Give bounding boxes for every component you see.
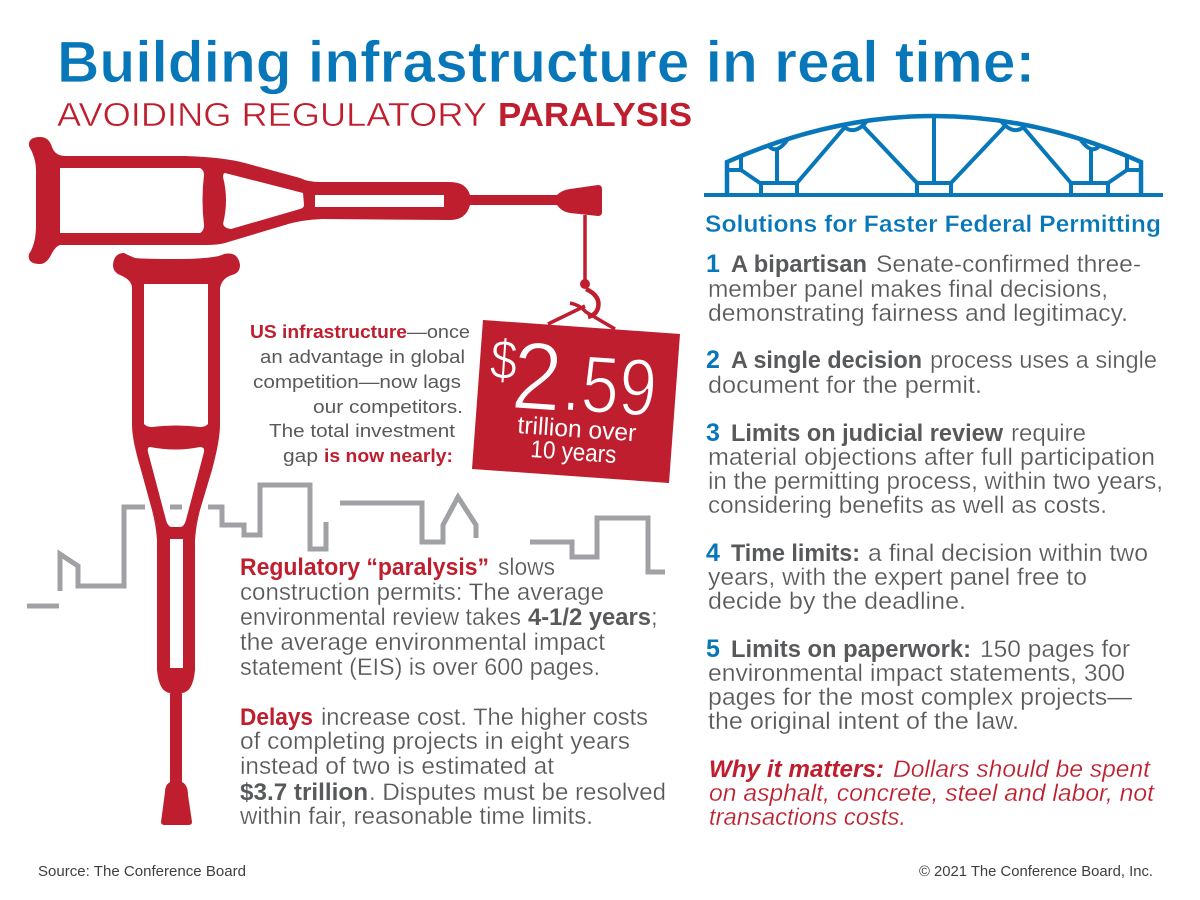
solution 2 bbox=[706, 346, 1157, 399]
solution 4: 4 bbox=[706, 539, 720, 567]
big number: .59 bbox=[560, 338, 660, 435]
solution 3: require bbox=[1011, 420, 1086, 447]
text: delays: Delays bbox=[240, 704, 313, 731]
solution 5: 5 bbox=[706, 635, 720, 663]
icon: horizontal crutch crane bbox=[29, 137, 602, 264]
solution 2: 2 bbox=[706, 346, 720, 374]
text: US infrastructure: —once bbox=[407, 321, 470, 342]
solution 5: pages for the most complex projects— bbox=[708, 684, 1132, 711]
subtitle: AVOIDING REGULATORY bbox=[57, 96, 487, 133]
text: delays: within fair, reasonable time limits. bbox=[239, 803, 593, 830]
callout: why it matters: Dollars should be spent bbox=[893, 756, 1151, 783]
text: delays: instead of two is estimated at bbox=[240, 753, 554, 780]
text: delays: . Disputes must be resolved bbox=[369, 779, 666, 806]
solution 4: Time limits: bbox=[731, 540, 860, 567]
text: delays bbox=[239, 704, 666, 830]
big number bbox=[488, 320, 660, 435]
callout: why it matters bbox=[709, 756, 1155, 831]
text: regulatory paralysis: the average environmental impact bbox=[240, 629, 605, 656]
text: US infrastructure: an advantage in global bbox=[260, 346, 465, 367]
solution 4: a final decision within two bbox=[868, 540, 1148, 567]
text: US infrastructure: is now nearly: bbox=[324, 445, 453, 466]
solution 5 bbox=[706, 635, 1132, 735]
solution 1: A bipartisan bbox=[731, 251, 867, 278]
solution 4: decide by the deadline. bbox=[708, 588, 966, 615]
solution 5: the original intent of the law. bbox=[708, 708, 1019, 735]
text: regulatory paralysis: construction permits: The average bbox=[240, 579, 604, 606]
solution 3: Limits on judicial review bbox=[731, 420, 1003, 447]
footer: copyright: © 2021 The Conference Board, Inc. bbox=[919, 864, 1153, 880]
solution 3: considering benefits as well as costs. bbox=[708, 492, 1107, 519]
text: regulatory paralysis: statement (EIS) is over 600 pages. bbox=[240, 654, 600, 681]
text: US infrastructure bbox=[250, 321, 470, 466]
solution 2: document for the permit. bbox=[708, 372, 982, 399]
text: regulatory paralysis bbox=[240, 554, 658, 681]
solution 5: Limits on paperwork: bbox=[731, 636, 971, 663]
text: delays: increase cost. The higher costs bbox=[321, 704, 648, 731]
callout: why it matters: on asphalt, concrete, steel and labor, not bbox=[709, 780, 1155, 807]
solution 2: process uses a single bbox=[930, 347, 1157, 374]
callout: why it matters: Why it matters: bbox=[709, 756, 884, 783]
text: US infrastructure: The total investment bbox=[269, 420, 455, 441]
sign caption: trillion over bbox=[517, 412, 637, 447]
text: regulatory paralysis: Regulatory “paralysis” bbox=[240, 554, 489, 581]
icon: vertical crutch bbox=[113, 253, 240, 825]
text: regulatory paralysis: slows bbox=[498, 554, 555, 581]
solution 1: 1 bbox=[706, 250, 720, 278]
solution 4: years, with the expert panel free to bbox=[708, 564, 1087, 591]
big number: $ bbox=[488, 327, 519, 392]
icon: bridge bbox=[704, 116, 1163, 195]
text: US infrastructure: gap bbox=[283, 445, 318, 466]
solution 1: member panel makes final decisions, bbox=[708, 276, 1108, 303]
text: delays: $3.7 trillion bbox=[240, 779, 368, 806]
solution 4 bbox=[706, 539, 1148, 615]
text: regulatory paralysis: 4-1/2 years bbox=[528, 604, 651, 631]
solution 3 bbox=[706, 419, 1163, 519]
skyline bbox=[27, 485, 665, 606]
subtitle bbox=[57, 96, 692, 133]
text: US infrastructure: US infrastructure bbox=[250, 321, 407, 342]
solution 1 bbox=[706, 250, 1141, 327]
text: US infrastructure: competition—now lags bbox=[253, 371, 461, 392]
solution 3: material objections after full participation bbox=[708, 444, 1155, 471]
callout: why it matters: transactions costs. bbox=[709, 804, 906, 831]
text: delays: of completing projects in eight years bbox=[240, 728, 630, 755]
footer: source: Source: The Conference Board bbox=[38, 864, 246, 880]
text: regulatory paralysis: ; bbox=[651, 604, 658, 631]
price sign bbox=[472, 320, 680, 483]
text: US infrastructure: our competitors. bbox=[313, 396, 463, 417]
big number: 2 bbox=[509, 320, 566, 432]
icon: hook and straps bbox=[548, 215, 615, 329]
solution 2: A single decision bbox=[731, 347, 922, 374]
solution 3: in the permitting process, within two years, bbox=[708, 468, 1163, 495]
sign caption: 10 years bbox=[530, 436, 617, 469]
title: Building infrastructure in real time: bbox=[57, 30, 1035, 95]
solution 1: Senate-confirmed three- bbox=[876, 251, 1141, 278]
sign caption bbox=[517, 412, 637, 469]
solution 3: 3 bbox=[706, 419, 720, 447]
subtitle: PARALYSIS bbox=[498, 96, 692, 133]
solution 5: 150 pages for bbox=[980, 636, 1130, 663]
heading: solutions: Solutions for Faster Federal Permitting bbox=[705, 211, 1161, 238]
solution 1: demonstrating fairness and legitimacy. bbox=[708, 300, 1128, 327]
solution 5: environmental impact statements, 300 bbox=[708, 660, 1125, 687]
text: regulatory paralysis: environmental review takes bbox=[240, 604, 521, 631]
